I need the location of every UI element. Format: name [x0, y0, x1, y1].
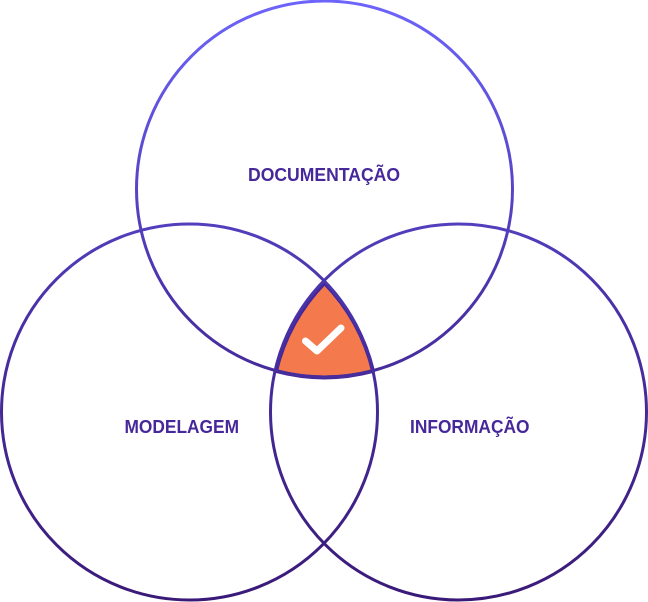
label: informação: INFORMAÇÃO: [410, 416, 530, 437]
circle: modelagem: [2, 224, 378, 600]
circle: documentação: [136, 1, 512, 377]
label: modelagem: MODELAGEM: [124, 417, 239, 437]
circle: informação: [270, 224, 646, 600]
central intersection: [276, 283, 373, 377]
label: documentação: DOCUMENTAÇÃO: [248, 164, 400, 185]
icon: check mark: [306, 328, 341, 351]
